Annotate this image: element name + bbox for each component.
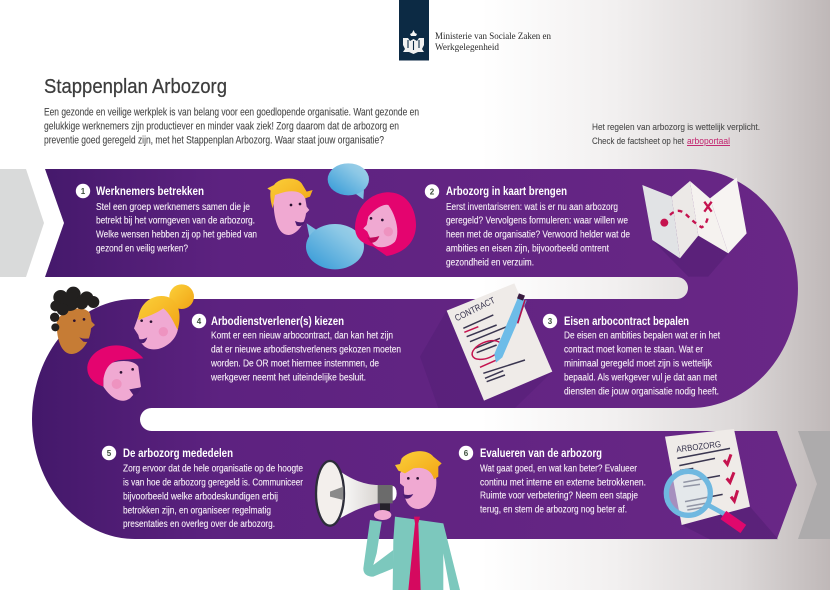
panel: step 5	[102, 446, 304, 530]
body step 2: heen met de organisatie? Verwoord helder wat de	[446, 230, 630, 240]
heading step 4: Arbodienstverlener(s) kiezen	[211, 316, 344, 328]
heading step 5: De arbozorg mededelen	[123, 448, 233, 460]
body step 3: minimaal geregeld moet zijn is wettelijk	[564, 358, 712, 370]
body step 4	[210, 330, 401, 384]
body step 3	[564, 330, 720, 398]
body step 2	[446, 202, 630, 268]
number badge 5	[102, 446, 116, 460]
icon: folded map with route	[642, 178, 747, 277]
heading step 2: Arbozorg in kaart brengen	[446, 186, 567, 198]
body step 6: continu met interne en externe betrokkenen.	[480, 478, 646, 488]
ministry name	[435, 32, 551, 53]
ministry name: Werkgelegenheid	[435, 43, 499, 53]
intro text: gelukkige werknemers zijn productiever en minder vaak ziek! Zorg daarom dat de arbozorg en	[44, 120, 399, 132]
number badge 4	[192, 314, 206, 328]
side note: legal obligation	[592, 122, 760, 147]
panel: step 1	[76, 184, 257, 254]
body step 3: De eisen en ambities bepalen wat er in het	[564, 330, 720, 342]
body step 2: gezondheid en verzuim.	[446, 258, 534, 268]
panel: step 4	[192, 314, 401, 384]
body step 5: presentaties en overleg over de arbozorg.	[123, 519, 275, 530]
number badge 2	[425, 184, 439, 199]
side note: legal obligation: Het regelen van arbozorg is wettelijk verplicht.	[592, 122, 760, 133]
body step 6: Wat gaat goed, en wat kan beter? Evalueer	[480, 464, 638, 474]
logo: ministry crest banner	[399, 0, 429, 60]
body step 1: Stel een groep werknemers samen die je	[96, 202, 250, 213]
heading step 6: Evalueren van de arbozorg	[480, 448, 602, 460]
body step 5: is van hoe de arbozorg geregeld is. Communiceer	[123, 478, 304, 488]
heading step 3: Eisen arbocontract bepalen	[564, 316, 689, 328]
number badge 1	[76, 184, 90, 198]
number badge 3: 3	[548, 317, 553, 326]
icon: checklist with magnifier	[665, 429, 778, 539]
body step 4: werkgever neemt het uiteindelijke besluit.	[210, 372, 366, 384]
body step 5	[123, 464, 304, 530]
intro text	[44, 106, 419, 146]
panel: step 2	[425, 184, 630, 268]
body step 1: betrekt bij het vormgeven van de arbozorg.	[96, 216, 255, 226]
body step 5: bijvoorbeeld welke arbodeskundigen erbij	[123, 492, 278, 502]
icon: contract with pen	[420, 283, 552, 408]
body step 1: Welke wensen hebben zij op het gebied van	[96, 230, 257, 240]
body step 3: contract moet komen te staan. Wat er	[564, 344, 704, 356]
winding purple ribbon	[32, 169, 798, 539]
body step 6: terug, en stem de arbozorg nog beter af.	[480, 504, 627, 516]
number badge 6: 6	[464, 449, 469, 458]
number badge 4: 4	[197, 317, 202, 326]
intro text: preventie goed geregeld zijn, met het Stappenplan Arbozorg. Waar staat jouw organisatie?	[44, 134, 384, 146]
side note: legal obligation: arboportaal	[687, 136, 730, 147]
body step 2: ambities en eisen zijn, bijvoorbeeld omtrent	[446, 244, 609, 254]
icon: three faces	[50, 284, 194, 401]
body step 5: betrokken zijn, en organiseer regelmatig	[123, 506, 271, 516]
body step 2: Eerst inventariseren: wat is er nu aan arbozorg	[446, 202, 618, 213]
body step 5: Zorg ervoor dat de hele organisatie op de hoogte	[123, 464, 303, 474]
number badge 3	[543, 314, 557, 328]
icon: checklist with magnifier: ARBOZORG	[676, 439, 722, 454]
side note: legal obligation: Check de factsheet op het	[592, 136, 684, 147]
body step 4: worden. De OR moet hiermee instemmen, de	[210, 358, 379, 370]
icon: contract with pen: CONTRACT	[453, 295, 497, 323]
intro text: Een gezonde en veilige werkplek is van belang voor een goedlopende organisatie. Want gezonde en	[44, 106, 419, 118]
icon: two talking faces with speech bubbles	[267, 163, 416, 269]
number badge 6	[459, 446, 473, 460]
panel: step 6	[459, 446, 646, 516]
ministry name: Ministerie van Sociale Zaken en	[435, 32, 551, 42]
body step 2: geregeld? Vervolgens formuleren: waar willen we	[446, 216, 628, 226]
body step 4: dat er nieuwe arbodienstverleners gekozen moeten	[211, 344, 401, 356]
number badge 1: 1	[81, 187, 86, 196]
panel: step 3	[543, 314, 720, 398]
body step 4: Komt er een nieuw arbocontract, dan kan het zijn	[211, 330, 393, 342]
body step 3: diensten die jouw organisatie nodig heeft.	[564, 386, 719, 398]
icon: person with megaphone	[316, 451, 460, 590]
number badge 5: 5	[107, 449, 112, 458]
arrow: left grey chevron	[0, 169, 44, 277]
body step 3: bepaald. Als werkgever vul je dat aan met	[564, 372, 717, 384]
body step 1	[96, 202, 257, 254]
body step 6	[480, 464, 646, 516]
arrow: right grey chevron	[798, 431, 830, 539]
body step 6: Ruimte voor verbetering? Neem een stapje	[480, 490, 638, 502]
number badge 2: 2	[430, 188, 435, 196]
title: Stappenplan Arbozorg	[44, 76, 227, 98]
body step 1: gezond en veilig werken?	[96, 244, 188, 254]
heading step 1: Werknemers betrekken	[96, 186, 204, 198]
